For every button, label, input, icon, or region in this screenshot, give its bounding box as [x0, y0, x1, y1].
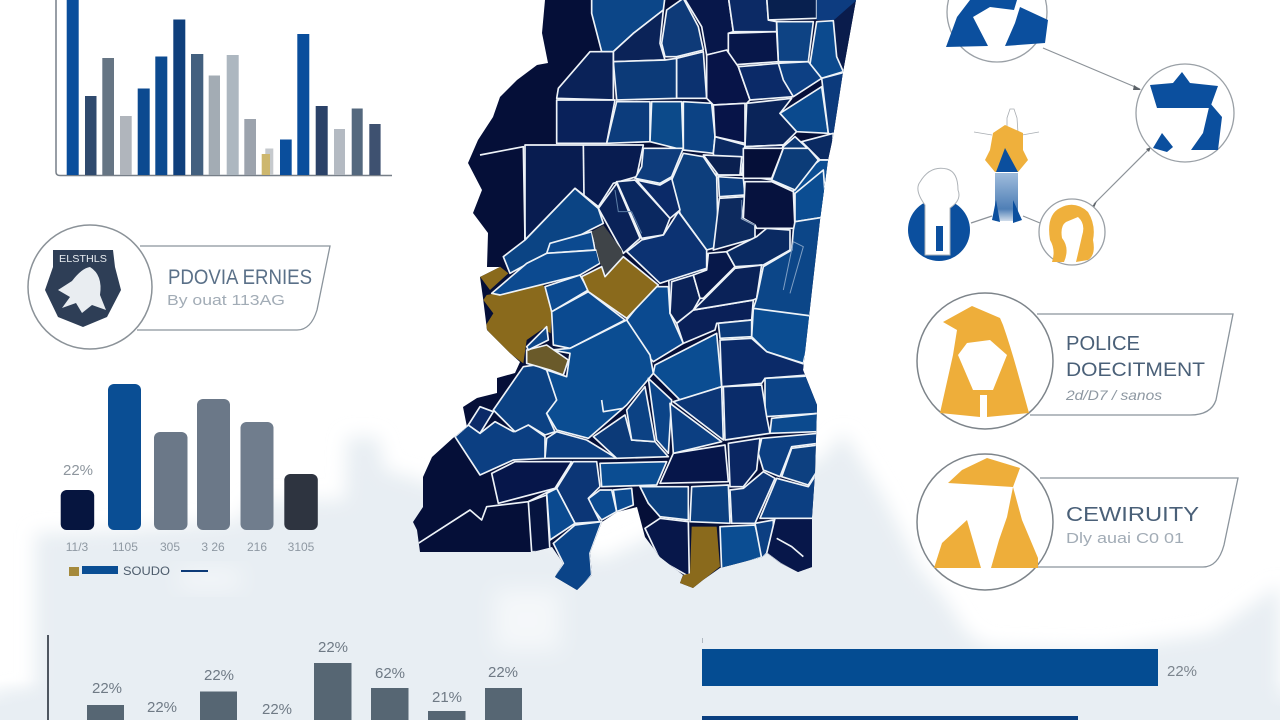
category labels [66, 540, 315, 554]
value labels: 22% [204, 667, 234, 684]
icon: shield badge [45, 250, 121, 327]
category labels: 11/3 [66, 540, 89, 554]
bars [61, 384, 318, 530]
chart axes [56, 0, 392, 176]
connector lines [971, 48, 1150, 223]
southern counties [418, 270, 818, 593]
value labels: 22% [318, 639, 348, 656]
category labels: 3105 [288, 540, 315, 554]
value labels: 21% [432, 689, 462, 706]
callout box [137, 246, 330, 330]
callout box [1037, 478, 1238, 567]
node: orange person [1039, 199, 1105, 265]
bar chart: six rounded bars [61, 384, 318, 578]
icon: shield badge: ELSTHLS [59, 254, 107, 265]
background: pale skyline [0, 434, 1280, 720]
value labels: 22% [488, 664, 518, 681]
legend [69, 564, 208, 578]
axis [47, 635, 49, 720]
subtitle: 2d/D7 / sanos [1065, 387, 1162, 403]
node: left person [908, 168, 970, 261]
central counties [582, 148, 827, 323]
title second line: DOECITMENT [1066, 360, 1205, 381]
bar chart: bottom left columns [47, 635, 522, 720]
value label: 22% [63, 462, 93, 479]
icon: orange graduate [940, 306, 1029, 417]
bar one [702, 649, 1158, 686]
tick [702, 638, 703, 643]
panel: community [917, 454, 1238, 590]
node: centre figure [974, 109, 1039, 223]
value labels: 62% [375, 665, 405, 682]
person circle [917, 454, 1053, 590]
panel: police department [917, 293, 1233, 429]
arrow heads [1092, 85, 1151, 208]
map: counties [400, 0, 870, 600]
value labels [92, 639, 518, 718]
northern counties [480, 0, 857, 312]
node: top officer [946, 0, 1048, 62]
bar two [702, 716, 1078, 720]
category labels: 3 26 [201, 540, 225, 554]
value labels: 22% [262, 701, 292, 718]
subtitle: Dly auai C0 01 [1066, 530, 1184, 547]
bar chart: bottom right horizontal [702, 638, 1197, 720]
callout subtitle: By ouat 113AG [167, 292, 285, 309]
title: POLICE [1066, 333, 1140, 355]
map base [400, 0, 870, 600]
category labels: 216 [247, 540, 267, 554]
legend: SOUDO [123, 564, 170, 578]
callout title: PDOVIA ERNIES [168, 266, 312, 289]
value labels: 22% [92, 680, 122, 697]
value labels: 22% [147, 699, 177, 716]
person circle [917, 293, 1053, 429]
icon: orange graduate [934, 458, 1038, 568]
columns [87, 663, 522, 720]
network diagram [908, 0, 1234, 265]
panel: badge callout [28, 225, 330, 349]
node: right officer [1136, 64, 1234, 162]
bar chart: top left [56, 0, 392, 176]
category labels: 305 [160, 540, 180, 554]
chart bars [67, 0, 381, 175]
badge circle [28, 225, 152, 349]
title: CEWIRUITY [1066, 504, 1199, 526]
category labels: 1105 [112, 540, 138, 554]
bar one value: 22% [1167, 663, 1197, 680]
callout box [1030, 314, 1233, 415]
